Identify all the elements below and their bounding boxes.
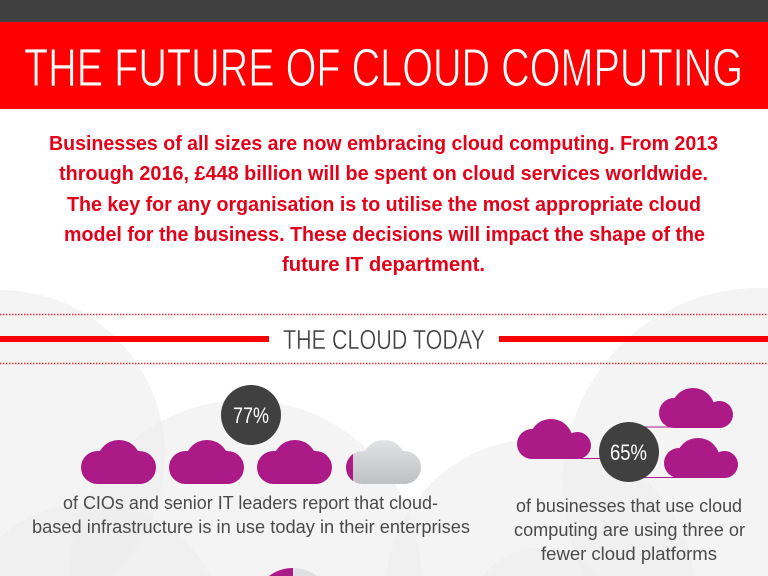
section header: the cloud today (0, 314, 768, 364)
badge: 65% (599, 422, 659, 482)
intro paragraph: through 2016, £448 billion will be spent on cloud services worldwide. (59, 163, 708, 185)
badge: 77%: 77% (233, 403, 269, 428)
top dark bar (0, 0, 768, 22)
icon group: clouds (517, 388, 738, 478)
caption: 65%: fewer cloud platforms (541, 544, 717, 564)
intro paragraph (49, 133, 718, 276)
caption: 65%: of businesses that use cloud (516, 496, 742, 516)
caption: 65%: computing are using three or (514, 520, 745, 540)
intro paragraph: model for the business. These decisions will impact the shape of the (64, 224, 705, 246)
caption: 77% (32, 493, 470, 537)
background clouds (0, 288, 768, 576)
intro paragraph: future IT department. (282, 254, 485, 276)
badge: 65%: 65% (610, 440, 647, 465)
connector lines (580, 427, 680, 478)
section header: the cloud today: THE CLOUD TODAY (283, 324, 485, 355)
pie chart (cropped) (269, 568, 317, 576)
caption: 77%: of CIOs and senior IT leaders report that cloud- (63, 493, 438, 513)
badge: 77% (221, 385, 281, 445)
intro paragraph: Businesses of all sizes are now embracing cloud computing. From 2013 (49, 133, 718, 155)
caption: 77%: based infrastructure is in use today in their enterprises (32, 517, 470, 537)
panel: 77% statistic (32, 385, 470, 537)
title banner (0, 22, 768, 109)
icon row: clouds (81, 440, 421, 484)
panel: 65% statistic (514, 388, 745, 564)
caption: 65% (514, 496, 745, 564)
intro paragraph: The key for any organisation is to utilise the most appropriate cloud (67, 194, 701, 216)
